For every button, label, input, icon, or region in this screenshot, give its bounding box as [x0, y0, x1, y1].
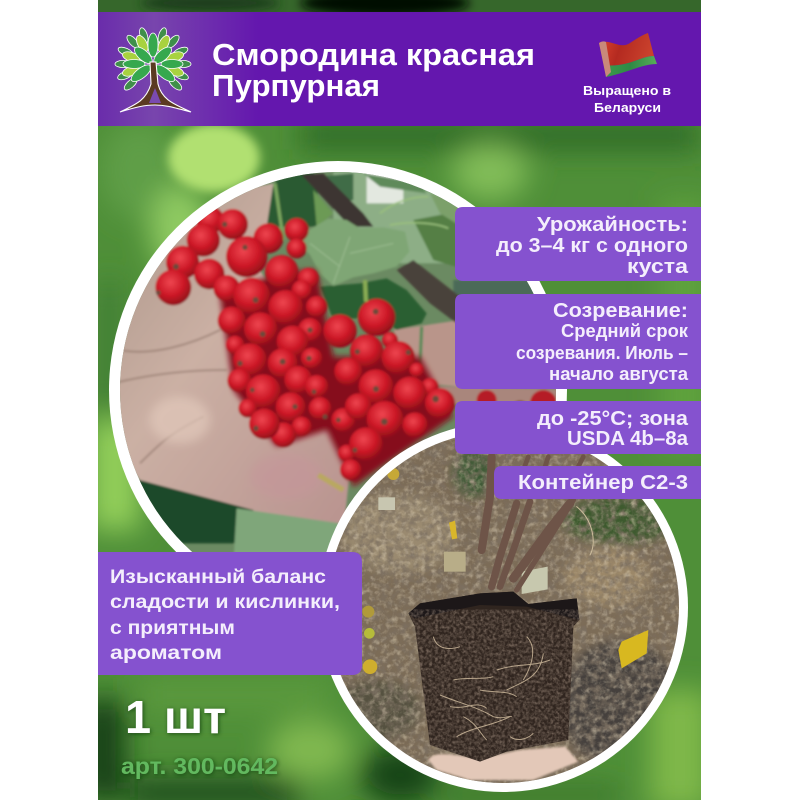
hand strip visible right of panels: [327, 383, 587, 423]
panel: container: Контейнер С2-3: [518, 472, 688, 494]
panel: taste description: с приятным: [110, 617, 235, 639]
blurred background tones: [453, 450, 493, 497]
panel: ripening: [455, 294, 701, 389]
photo circle: seedling root ball: [318, 420, 700, 800]
panel: ripening: начало августа: [549, 364, 689, 384]
panel: taste description: [98, 552, 362, 675]
flag of Belarus: [599, 33, 657, 77]
berry calyx dots: [156, 222, 439, 452]
article number: арт. 300-0642: [121, 753, 278, 779]
panel: frost hardiness: [455, 401, 701, 454]
roots: [433, 637, 550, 740]
light leaf: [295, 218, 409, 286]
berries: [155, 206, 455, 481]
title: [212, 37, 535, 103]
hand under root ball: [428, 747, 578, 780]
gold ring: [318, 475, 343, 490]
title: Смородина красная: [212, 37, 535, 72]
grown in Belarus caption: [583, 83, 671, 115]
panel: yield: до 3–4 кг с одного: [496, 235, 688, 257]
photo circle: redcurrant bunch in hand: [109, 161, 567, 552]
panel: yield: куста: [627, 256, 689, 278]
logo: tree: [115, 27, 191, 112]
panel: taste description: ароматом: [110, 642, 222, 664]
background: blurred green foliage: [80, 0, 710, 800]
dark leaf: [320, 278, 427, 330]
branch: [302, 173, 373, 227]
back berries shadow: [220, 270, 453, 487]
panel: taste description: сладости и кислинки,: [110, 591, 340, 613]
pale leaf under hand: [232, 507, 338, 552]
panel: frost hardiness: USDA 4b–8a: [567, 428, 689, 450]
title: Пурпурная: [212, 68, 380, 103]
grown in Belarus caption: Беларуси: [594, 100, 661, 115]
panel: yield: [455, 207, 701, 281]
hand: [90, 183, 353, 533]
panel: container: [494, 466, 701, 499]
grown in Belarus caption: Выращено в: [583, 83, 671, 98]
labels and tags: [378, 497, 395, 510]
quantity label: 1 шт: [125, 691, 226, 743]
panel: ripening: Средний срок: [561, 321, 689, 341]
dark leaf under hand: [139, 479, 254, 545]
stems: [482, 457, 593, 590]
panel: frost hardiness: до -25°С; зона: [537, 408, 689, 430]
header band: [98, 12, 701, 126]
dark leaves behind: [266, 173, 318, 228]
root ball: [408, 592, 579, 762]
panel: taste description: Изысканный баланс: [110, 566, 326, 588]
panel: yield: Урожайность:: [537, 214, 688, 236]
panel: ripening: Созревание:: [553, 300, 688, 322]
panel: ripening: созревания. Июль –: [516, 343, 688, 363]
